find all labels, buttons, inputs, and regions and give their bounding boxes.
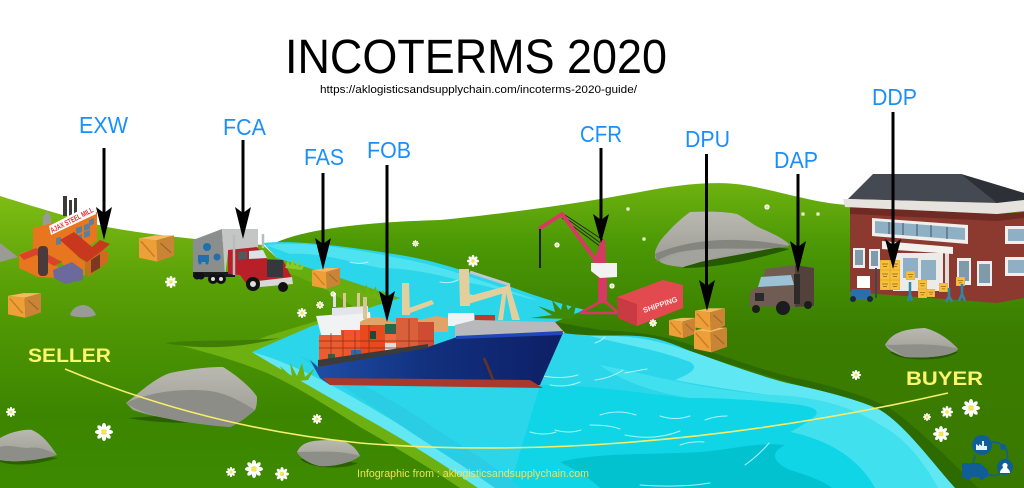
beige cargo bags (360, 316, 448, 332)
EXW: EXW (79, 112, 128, 138)
van cab (749, 265, 795, 307)
accommodation block (316, 293, 372, 338)
silo (38, 246, 48, 276)
hill: far right (277, 183, 1024, 488)
cab (591, 263, 617, 278)
DAP (774, 147, 818, 273)
windshield (758, 275, 794, 287)
upper window band (872, 218, 968, 244)
trailer end (193, 229, 225, 277)
roof dark side (961, 174, 1024, 203)
rock: right (885, 328, 958, 360)
centre hall roof (60, 232, 110, 262)
tower (598, 278, 607, 302)
grille (267, 260, 283, 277)
base legs (580, 302, 617, 313)
left wing wall (19, 250, 60, 278)
door (794, 274, 800, 304)
CFR (580, 121, 622, 243)
river deep water (560, 444, 832, 488)
rocks (0, 212, 958, 468)
incoterm labels and arrows (79, 84, 917, 322)
hull stripe (456, 331, 563, 339)
mid crane (402, 283, 434, 315)
fascia (843, 199, 1024, 214)
FCA (223, 114, 267, 239)
river middle (510, 385, 875, 488)
counter rigging (562, 215, 603, 247)
FAS (304, 144, 344, 270)
pallet boxes (880, 260, 965, 298)
logo icon: factory, truck, customer network (962, 435, 1013, 480)
buyer label: BUYER (906, 369, 983, 390)
hill shadow sliver (165, 338, 280, 347)
bumper (258, 277, 293, 287)
crates: DPU stack (669, 308, 727, 352)
water tower (43, 211, 51, 228)
mill windows (56, 218, 94, 245)
exhaust stacks (234, 234, 263, 275)
forward deck (455, 320, 565, 339)
hall side wall (85, 249, 108, 277)
roof (848, 174, 1024, 203)
rust marks (484, 358, 493, 380)
rock: bottom left (0, 430, 58, 465)
CFR: CFR (580, 121, 622, 147)
wall band (850, 207, 1024, 221)
FOB (367, 137, 411, 322)
cargo ship (310, 269, 565, 388)
right windows (1005, 226, 1024, 276)
forklift (850, 268, 877, 302)
bow crane top wire (470, 272, 510, 285)
DPU (685, 126, 730, 311)
dark bank right (555, 322, 978, 488)
delivery van: DAP (749, 265, 814, 315)
hill: near left (0, 196, 520, 488)
wheels (194, 272, 288, 292)
source url: https://aklogisticsandsupplychain.com/incoterms-2020-guide/ (320, 84, 638, 96)
hull (310, 333, 563, 385)
rock: bottom centre (297, 440, 360, 468)
river lower second band (300, 356, 520, 488)
rock: behind factory (0, 243, 18, 262)
hall walls (62, 245, 85, 276)
crate: FAS (312, 268, 340, 289)
shipping container (617, 280, 683, 326)
river (252, 242, 955, 488)
hubs (211, 277, 256, 287)
rock: big left (126, 367, 257, 427)
daisies (6, 204, 980, 481)
grass tuft: FAS (285, 258, 305, 270)
seller label: SELLER (28, 346, 111, 367)
warehouse: DDP (843, 174, 1024, 303)
grass tuft: ship stern (356, 284, 384, 300)
FCA: FCA (223, 114, 267, 140)
grass tuft: lower left (280, 363, 315, 382)
red boot topping (323, 378, 543, 388)
river lower highlight (252, 352, 495, 488)
DDP (872, 84, 917, 269)
crate: bottom left (8, 293, 41, 318)
bright green bank at FAS (277, 258, 400, 312)
factory: Ajax Steel Mill (19, 196, 110, 284)
bright green bank left (165, 300, 478, 488)
bow crane (459, 269, 520, 320)
entrance (882, 241, 953, 291)
grass tuft: bow (530, 298, 586, 319)
wheels (776, 301, 790, 315)
rock: small left (70, 305, 96, 317)
crate: near factory (139, 235, 174, 262)
cab (228, 247, 292, 287)
deck rail (318, 344, 428, 367)
shipping container: SHIPPING (642, 295, 679, 315)
cab window (238, 251, 247, 260)
truck: FCA (193, 229, 293, 292)
workers (908, 282, 965, 302)
mast (593, 240, 606, 263)
EXW (79, 112, 128, 240)
landscape: hills and river (0, 183, 1024, 488)
DDP: DDP (872, 84, 917, 110)
river second light band (600, 365, 938, 488)
white containers forward (448, 313, 474, 326)
main mill block (33, 212, 97, 262)
hall door (91, 254, 100, 273)
chimneys (63, 196, 77, 216)
windshield (249, 250, 267, 259)
title: INCOTERMS 2020 (285, 31, 667, 84)
mill sign: AJAX STEEL MILL (49, 205, 95, 235)
DAP: DAP (774, 147, 818, 173)
left wing roof (19, 248, 62, 266)
trailer side (222, 229, 258, 277)
FOB: FOB (367, 137, 411, 163)
port crane: CFR (539, 214, 617, 313)
cargo box (795, 265, 814, 307)
rock: top centre (655, 212, 790, 268)
river right light band (590, 336, 955, 488)
container stacks (319, 318, 434, 367)
footer credit: Infographic from : aklogisticsandsupplychain.com (357, 468, 589, 480)
FAS: FAS (304, 144, 344, 170)
hoist wire and hook (539, 229, 541, 268)
wall (850, 207, 1024, 303)
river upper highlight band (266, 244, 538, 300)
water ripples (350, 262, 769, 486)
boom (539, 214, 597, 262)
chassis (193, 272, 235, 277)
trailer icon (198, 243, 220, 264)
seller to buyer curve (65, 369, 948, 448)
red forward container (475, 315, 495, 321)
DPU: DPU (685, 126, 730, 152)
stacked crates (53, 262, 83, 284)
left small windows (853, 248, 992, 286)
grille (755, 293, 764, 301)
